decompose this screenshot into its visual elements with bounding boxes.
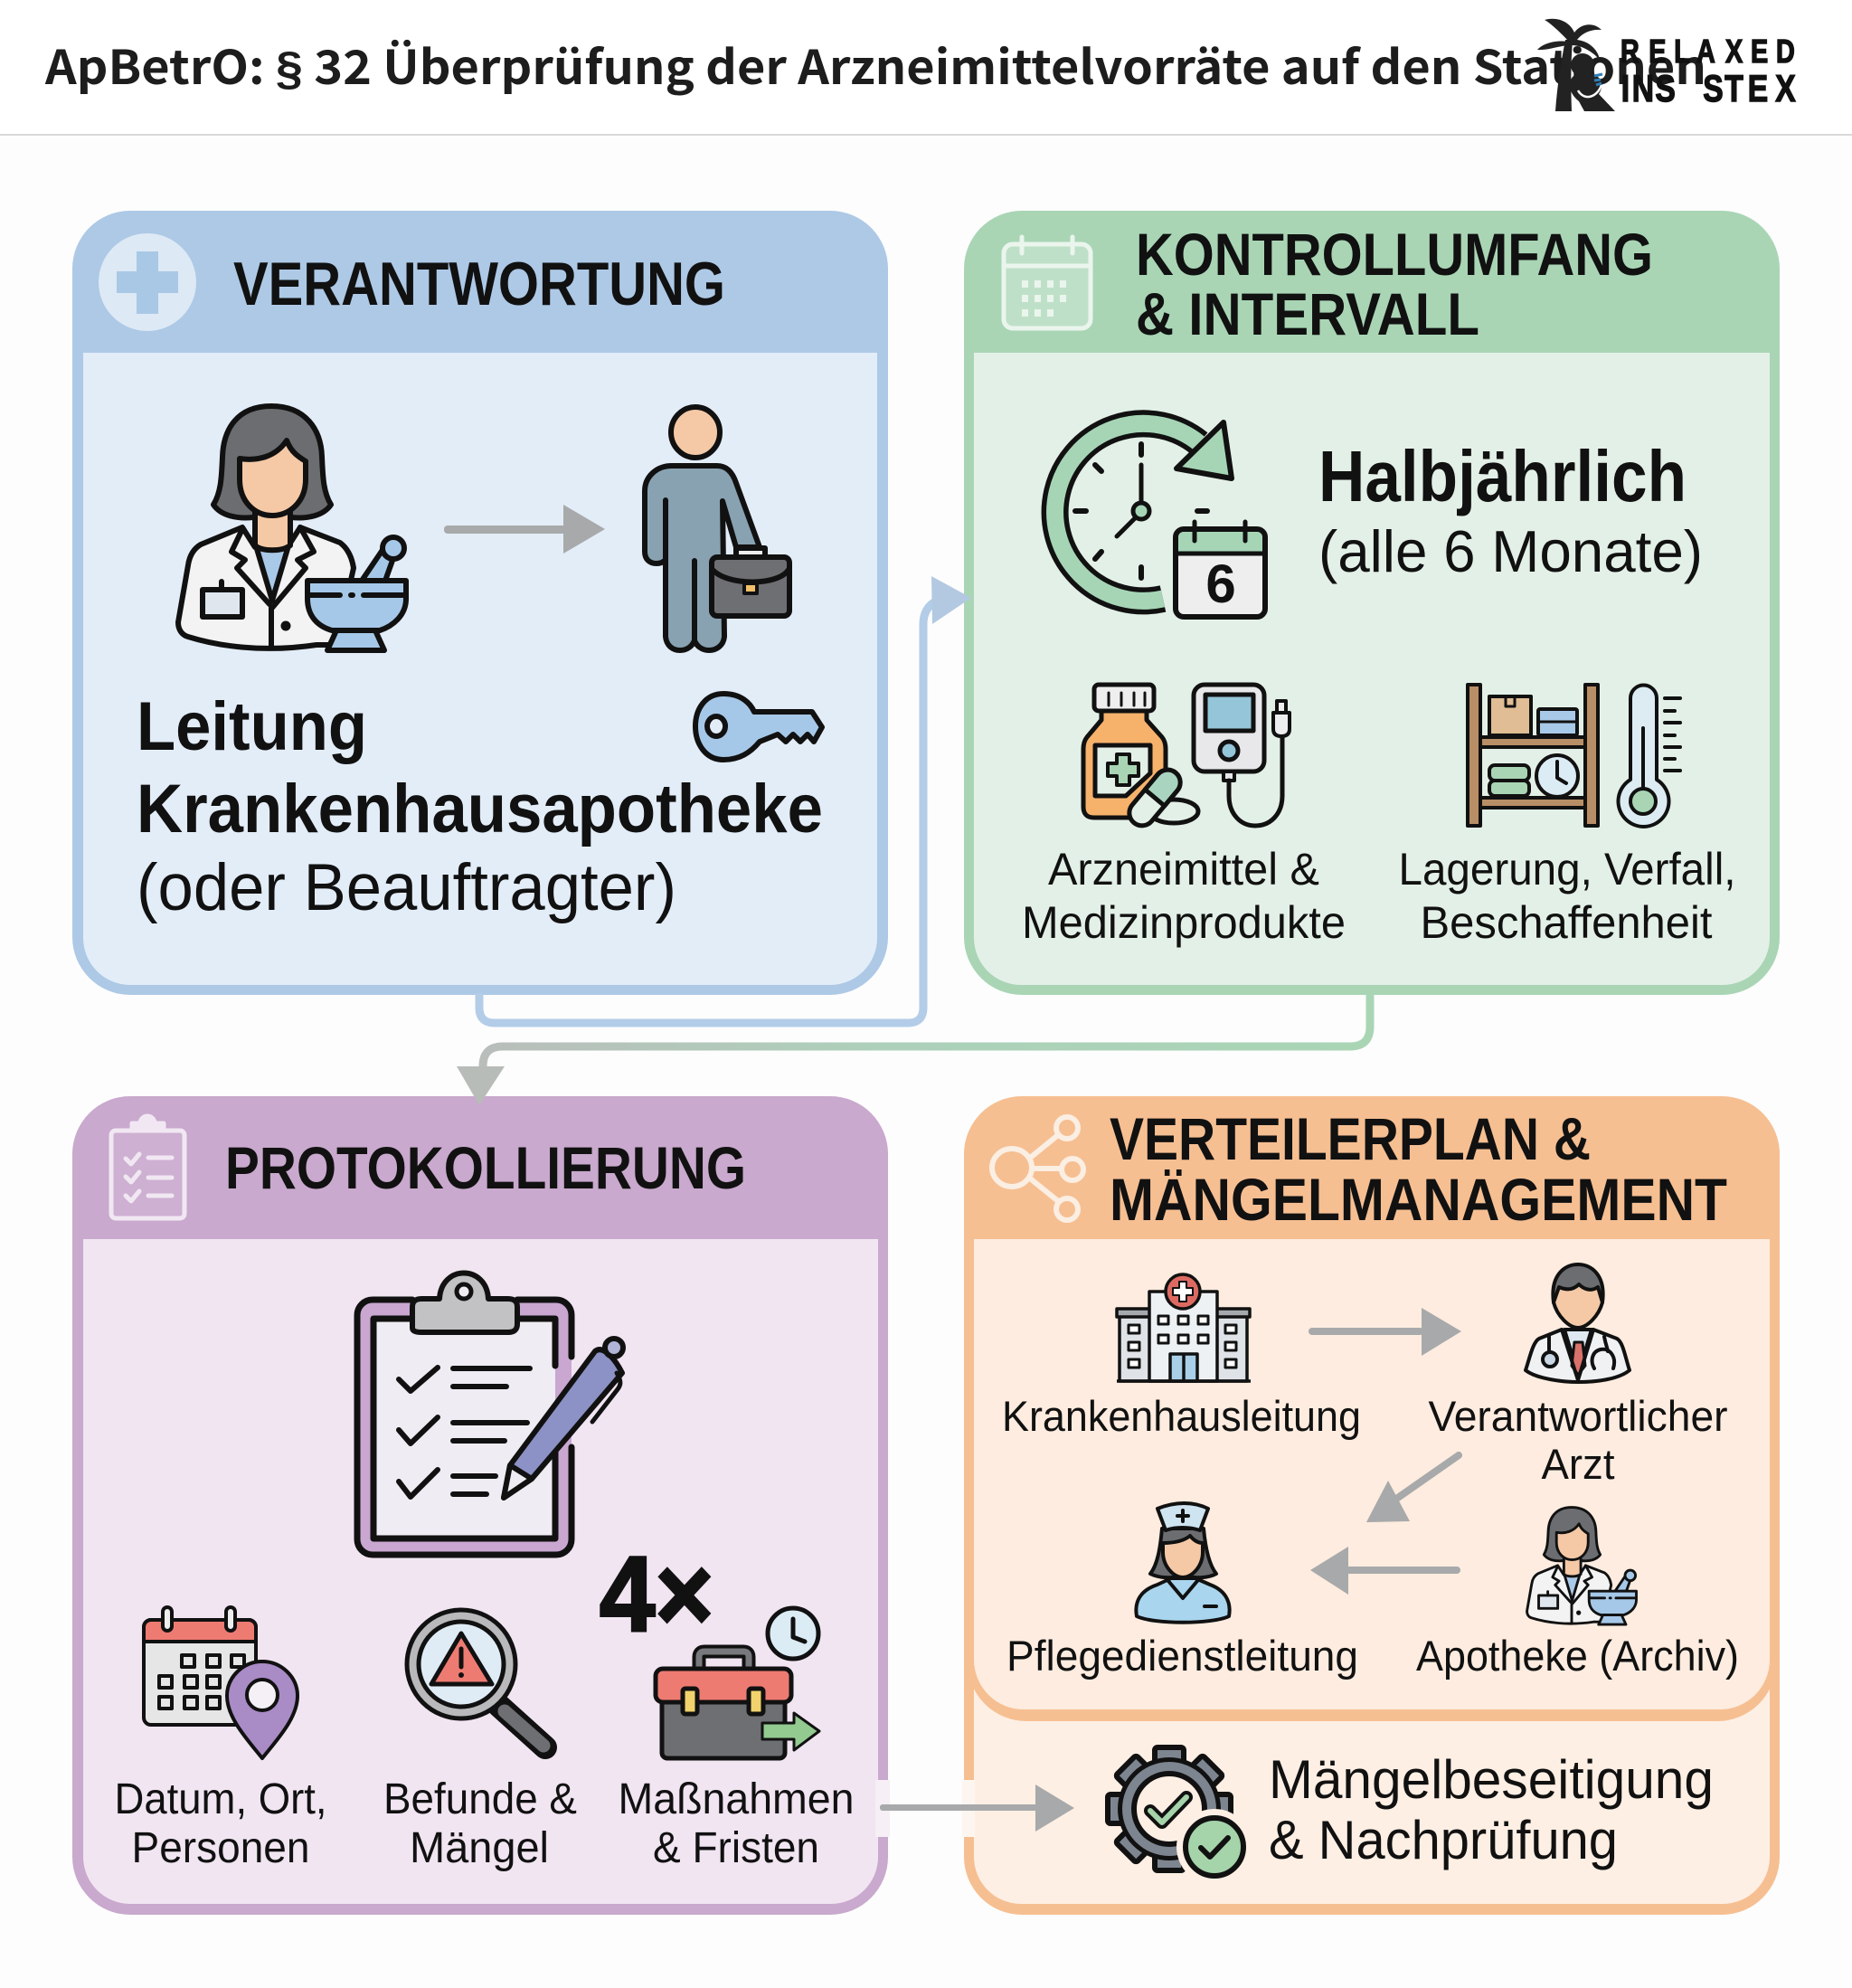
text: findings and defects: [383, 1775, 577, 1872]
icon: medicines and medical device: [1083, 685, 1290, 831]
logo wordmark: INS STEX: [1621, 69, 1796, 110]
arrow: protocol to defect remediation: [880, 1784, 1074, 1832]
connector: blue panel to green panel: [479, 576, 971, 1023]
logo: Relaxed Instex: [1537, 19, 1796, 111]
text: responsible role: Leitung: [137, 688, 367, 765]
text: medicines and medical devices: Medizinprodukte: [1022, 897, 1346, 948]
label: responsible physician: [1429, 1392, 1727, 1488]
text: medicines and medical devices: [1022, 844, 1346, 948]
text: semiannual interval: Halbjährlich: [1318, 436, 1687, 516]
icon: header calendar: [1004, 237, 1091, 328]
text: medicines and medical devices: Arzneimittel &: [1048, 844, 1319, 895]
heading: VERTEILERPLAN &: [1110, 1105, 1591, 1172]
panel: Verteilerplan und Maengelmanagement: [962, 1096, 1780, 1915]
text: defect remediation and recheck: Mängelbeseitigung: [1269, 1749, 1714, 1810]
icon: toolbox with clock and arrow: [656, 1608, 819, 1758]
top title bar: [0, 0, 1852, 136]
title: ApBetrO: § 32 Überprüfung der Arzneimittelvorräte auf den Stationen: [44, 30, 1706, 98]
icon: storage shelf and thermometer: [1468, 685, 1680, 827]
icon: medical cross: [99, 233, 196, 331]
connector: green panel to purple panel: [457, 993, 1370, 1105]
icon: clock with circular arrow and calendar: 6: [1205, 554, 1236, 614]
label: responsible physician: Verantwortlicher: [1429, 1392, 1727, 1440]
icon: header clipboard: [111, 1116, 184, 1218]
arrow: hospital management to physician: [1309, 1308, 1461, 1356]
arrow: physician to nursing management: [1366, 1455, 1459, 1522]
icon: pharmacist: [178, 406, 406, 650]
text: responsible role: [137, 688, 823, 924]
text: defect remediation and recheck: [1269, 1749, 1714, 1870]
text: storage, expiry, condition: Lagerung, Verfall,: [1398, 844, 1736, 895]
text: storage, expiry, condition: [1398, 844, 1736, 948]
heading: [1136, 221, 1653, 347]
text: date, place, persons: Personen: [132, 1824, 309, 1872]
arrow: delegation: [444, 505, 605, 554]
icon: physician: [1526, 1264, 1630, 1382]
heading: MÄNGELMANAGEMENT: [1110, 1166, 1727, 1233]
text: defect remediation and recheck: & Nachprüfung: [1269, 1810, 1618, 1870]
panel: Verantwortung: [72, 211, 888, 995]
heading: VERANTWORTUNG: [233, 250, 725, 318]
text: date, place, persons: Datum, Ort,: [114, 1775, 327, 1823]
text: semiannual interval: [1318, 436, 1703, 584]
logo wordmark: [1620, 33, 1796, 110]
heading: [1110, 1105, 1727, 1233]
text: semiannual interval: (alle 6 Monate): [1318, 518, 1703, 584]
label: responsible physician: Arzt: [1541, 1440, 1615, 1488]
label: nursing management: Pflegedienstleitung: [1006, 1632, 1358, 1680]
text: measures and deadlines: [619, 1775, 854, 1872]
label: pharmacy archive: Apotheke (Archiv): [1416, 1632, 1739, 1680]
heading: KONTROLLUMFANG: [1136, 221, 1653, 288]
distribution plan sub-panel: [968, 1239, 1776, 1721]
icon: nurse: [1136, 1503, 1230, 1623]
icon: key: [695, 694, 822, 760]
label: four times: 4×: [600, 1535, 713, 1654]
label: hospital management: Krankenhausleitung: [1002, 1392, 1361, 1440]
text: date, place, persons: [114, 1775, 327, 1872]
icon: magnifier with warning: [407, 1610, 545, 1747]
text: measures and deadlines: Maßnahmen: [619, 1775, 854, 1823]
text: findings and defects: Befunde &: [383, 1775, 577, 1823]
text: responsible role: (oder Beauftragter): [137, 851, 676, 924]
icon: hospital: [1117, 1274, 1251, 1381]
icon: calendar with location pin: [144, 1607, 298, 1758]
panel: Kontrollumfang und Intervall: [964, 211, 1780, 995]
text: responsible role: Krankenhausapotheke: [137, 771, 823, 847]
palm tree and seated figure: [1537, 19, 1615, 111]
heading: PROTOKOLLIERUNG: [225, 1134, 746, 1201]
icon: gear with check marks: [1108, 1747, 1252, 1885]
icon: clock with circular arrow and calendar: [1055, 422, 1265, 617]
text: findings and defects: Mängel: [410, 1824, 549, 1872]
heading: & INTERVALL: [1136, 280, 1479, 347]
icon: delegate with briefcase: [645, 407, 789, 650]
icon: clipboard with checklist and pen: [357, 1273, 623, 1555]
arrow: pharmacy to nursing management: [1310, 1547, 1460, 1595]
panel: Protokollierung: [72, 1096, 890, 1915]
text: storage, expiry, condition: Beschaffenheit: [1420, 897, 1713, 948]
icon: share network: [992, 1117, 1083, 1220]
logo wordmark: RELAXED: [1620, 33, 1795, 70]
icon: pharmacist small: [1527, 1508, 1637, 1624]
text: measures and deadlines: & Fristen: [653, 1824, 819, 1872]
